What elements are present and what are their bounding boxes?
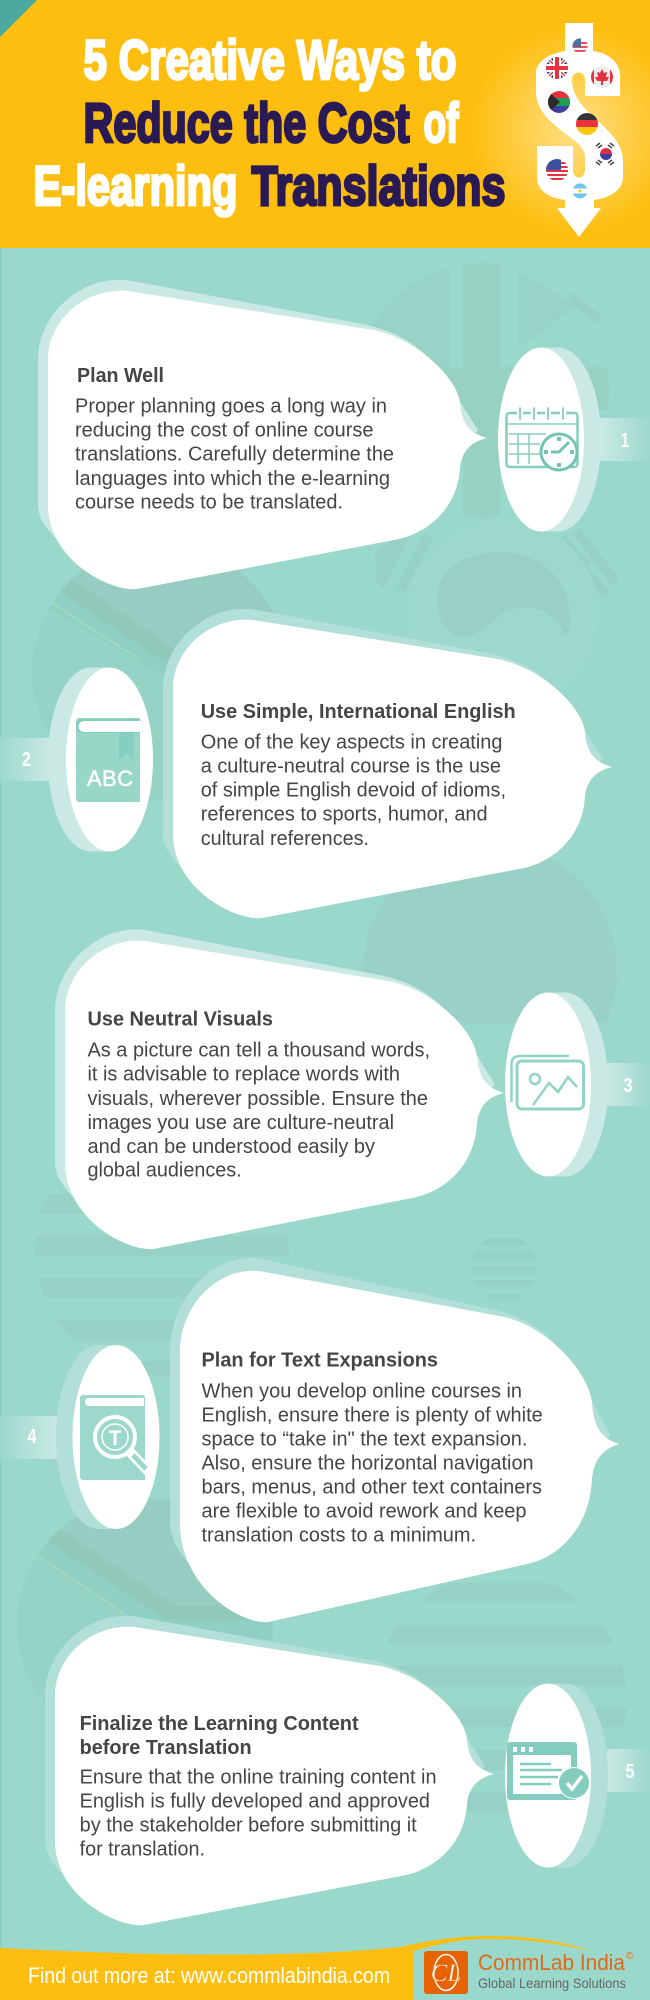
body text: English, ensure there is plenty of white bbox=[202, 1405, 543, 1427]
logo: CommLab India: CL bbox=[431, 1960, 461, 1987]
heading: Use Simple, International English bbox=[201, 701, 516, 723]
background: faint ghost flags bbox=[15, 263, 627, 1812]
icon: picture frame bbox=[512, 1056, 584, 1109]
number tab 1: 1 bbox=[621, 430, 629, 452]
flag: South Korea bbox=[596, 143, 614, 165]
title: Translations bbox=[252, 154, 506, 217]
body text: course needs to be translated. bbox=[75, 492, 343, 514]
ghost flag: South Africa lower bbox=[38, 1500, 273, 1696]
icon: calendar with clock bbox=[506, 408, 578, 470]
speech bubble 2 bbox=[163, 609, 612, 918]
body text: reducing the cost of online course bbox=[75, 420, 374, 442]
number tab 2 bbox=[0, 738, 50, 781]
flag: USA small bbox=[572, 38, 588, 52]
number tab 3: 3 bbox=[624, 1075, 632, 1097]
panel 5: Finalize the Learning Content bbox=[45, 1616, 650, 1925]
flag: Germany bbox=[576, 113, 598, 135]
flag: South Africa bbox=[548, 91, 570, 113]
speech bubble 4 bbox=[170, 1258, 619, 1622]
body text: One of the key aspects in creating bbox=[201, 731, 502, 753]
footer link text: Find out more at: www.commlabindia.com bbox=[28, 1963, 390, 1988]
number tab 4 bbox=[0, 1416, 58, 1459]
icon disc 5 bbox=[505, 1684, 608, 1868]
header banner bbox=[0, 0, 650, 248]
body text: by the stakeholder before submitting it bbox=[80, 1815, 417, 1837]
icon: dollar sign with world flags bbox=[536, 23, 623, 237]
heading: Plan Well bbox=[77, 365, 164, 387]
logo: CommLab India: Global Learning Solutions bbox=[478, 1975, 626, 1991]
heading: Plan for Text Expansions bbox=[202, 1350, 438, 1372]
icon: browser window with check bbox=[507, 1742, 590, 1800]
body text: Also, ensure the horizontal navigation bbox=[202, 1453, 534, 1475]
body text bbox=[201, 731, 506, 850]
body text: Ensure that the online training content in bbox=[80, 1767, 437, 1789]
number tab 5: 5 bbox=[626, 1761, 634, 1783]
panel 4: Plan for Text Expansions bbox=[0, 1258, 619, 1622]
number tab 5 bbox=[607, 1749, 650, 1792]
icon: ABC book: ABC bbox=[87, 766, 133, 791]
body text bbox=[202, 1381, 543, 1547]
icon: ABC book bbox=[76, 718, 140, 802]
body text: images you use are culture-neutral bbox=[88, 1112, 394, 1134]
body text: English is fully developed and approved bbox=[80, 1791, 430, 1813]
speech bubble 3 bbox=[55, 929, 504, 1249]
number tab 2: 2 bbox=[22, 749, 31, 771]
heading: Finalize the Learning Content bbox=[80, 1713, 359, 1735]
body text: global audiences. bbox=[88, 1160, 242, 1182]
flag: USA large bbox=[546, 159, 568, 181]
body text: visuals, wherever possible. Ensure the bbox=[88, 1088, 428, 1110]
icon: book with magnifier bbox=[80, 1395, 149, 1480]
icon disc 3 bbox=[505, 992, 608, 1176]
logo: CommLab India: © bbox=[626, 1951, 634, 1962]
body text bbox=[80, 1767, 437, 1861]
title: of bbox=[424, 91, 459, 154]
heading: Use Neutral Visuals bbox=[88, 1009, 273, 1031]
body text: languages into which the e-learning bbox=[75, 468, 390, 490]
heading bbox=[80, 1713, 359, 1759]
body text: a culture-neutral course is the use bbox=[201, 756, 501, 778]
footer yellow band bbox=[0, 1936, 590, 2000]
title: 5 Creative Ways to bbox=[84, 28, 456, 91]
body text: and can be understood easily by bbox=[88, 1136, 375, 1158]
body text bbox=[75, 396, 394, 514]
panel 3: Use Neutral Visuals bbox=[55, 929, 650, 1249]
title: E-learning bbox=[34, 154, 238, 217]
body text: for translation. bbox=[80, 1839, 205, 1861]
body text: As a picture can tell a thousand words, bbox=[88, 1040, 430, 1062]
logo: CommLab India: CommLab India bbox=[478, 1950, 626, 1975]
speech bubble 5 bbox=[45, 1616, 494, 1925]
number tab 1 bbox=[600, 418, 650, 461]
body text: are flexible to avoid rework and keep bbox=[202, 1501, 526, 1523]
body text: Proper planning goes a long way in bbox=[75, 396, 387, 418]
logo: CommLab India bbox=[424, 1950, 634, 1994]
number tab 4: 4 bbox=[28, 1426, 37, 1448]
body text: translation costs to a minimum. bbox=[202, 1525, 476, 1547]
body text: translations. Carefully determine the bbox=[75, 444, 394, 466]
panel 2: Use Simple, International English bbox=[0, 609, 612, 918]
body text: references to sports, humor, and bbox=[201, 804, 488, 826]
footer bbox=[0, 1936, 634, 2000]
body text: of simple English devoid of idioms, bbox=[201, 780, 506, 802]
panel 1: Plan Well bbox=[38, 280, 650, 589]
corner triangle bbox=[0, 0, 37, 37]
number tab 3 bbox=[607, 1063, 650, 1106]
body text: space to “take in" the text expansion. bbox=[202, 1429, 527, 1451]
heading: before Translation bbox=[80, 1737, 252, 1759]
icon disc 2 bbox=[48, 668, 153, 852]
title bbox=[34, 28, 506, 217]
body text: bars, menus, and other text containers bbox=[202, 1477, 542, 1499]
flag: UK bbox=[546, 57, 568, 79]
speech bubble 1 bbox=[38, 280, 487, 589]
icon disc 1 bbox=[498, 348, 601, 532]
body text bbox=[88, 1040, 430, 1182]
icon: book with magnifier: T bbox=[109, 1427, 122, 1450]
flag: Canada bbox=[591, 66, 613, 88]
ghost flag: South Africa upper bbox=[49, 570, 274, 688]
icon disc 4 bbox=[56, 1345, 160, 1529]
title: Reduce the Cost bbox=[84, 91, 410, 154]
body text: cultural references. bbox=[201, 828, 369, 850]
body text: it is advisable to replace words with bbox=[88, 1064, 400, 1086]
flag: Argentina bbox=[572, 184, 588, 198]
body text: When you develop online courses in bbox=[202, 1381, 522, 1403]
